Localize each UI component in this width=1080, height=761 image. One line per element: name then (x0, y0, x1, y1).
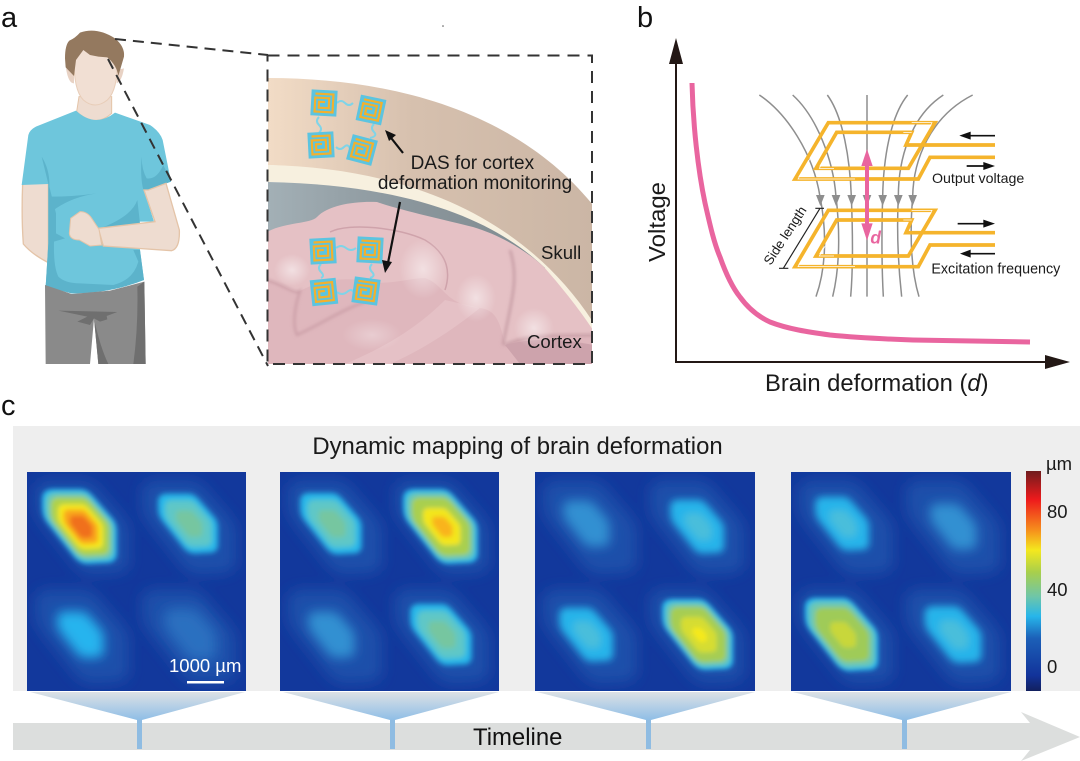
panel label a: a (1, 2, 18, 34)
bottom coil (795, 210, 995, 267)
arrowheads (669, 38, 1070, 369)
colour bar tick labels: µm (1046, 453, 1072, 474)
neck (77, 97, 112, 120)
panel label b: b (637, 2, 653, 34)
field lines (759, 95, 973, 297)
panel: skull and cortex inset (267, 78, 593, 364)
colour bar tick labels: 40 (1047, 579, 1068, 600)
distance arrow (861, 149, 873, 241)
DAS sensor array on cortex (309, 236, 384, 306)
inner cream layer (267, 165, 593, 340)
arrows: DAS pointers (382, 130, 403, 273)
hair (65, 31, 124, 76)
panel label c: c (1, 390, 16, 422)
label: excitation frequency: Excitation frequency (931, 261, 1061, 277)
skull (267, 78, 593, 335)
left arm (22, 183, 48, 263)
label: output voltage: Output voltage (932, 171, 1024, 187)
cortex (267, 202, 593, 364)
callout: DAS: DAS for cortex (411, 153, 535, 174)
icon: person (22, 31, 179, 364)
right arm (98, 183, 179, 251)
heatmap 2 (280, 472, 499, 691)
fist (69, 212, 102, 246)
scale bar label: 1000 µm (169, 655, 241, 676)
side length label: Side length (761, 204, 810, 268)
panel: dynamic mapping background (13, 426, 1080, 691)
diagram: coupled coils with field lines (759, 95, 1061, 297)
small arrows (958, 132, 995, 258)
field arrowheads (816, 195, 917, 206)
timeline arrow (13, 712, 1080, 761)
shirt shading (42, 157, 171, 293)
label: Skull: Skull (541, 242, 581, 263)
scale bar (187, 681, 224, 684)
timeline markers (30, 692, 1011, 749)
heatmap 3 (535, 472, 755, 691)
face (74, 47, 117, 105)
heatmap 4 (791, 472, 1011, 691)
heatmap 1 (27, 472, 246, 691)
dura layer (268, 182, 545, 268)
label: Cortex: Cortex (527, 331, 582, 352)
timeline label: Timeline (473, 724, 562, 751)
x axis label: Brain deformation (d) (765, 370, 989, 397)
axes (676, 60, 1048, 362)
side length bracket (779, 208, 824, 268)
callout: DAS: deformation monitoring (378, 173, 572, 194)
y axis label: Voltage (644, 182, 670, 262)
colour bar (1026, 471, 1041, 691)
distance label: d (870, 227, 881, 247)
trouser shading (58, 282, 146, 364)
colour bar tick labels: 0 (1047, 656, 1057, 677)
chart: voltage vs brain deformation (644, 38, 1070, 397)
colour bar tick labels (1046, 453, 1072, 677)
heading: dynamic mapping: Dynamic mapping of brain deformation (312, 433, 723, 460)
dashed inset frame (268, 56, 592, 364)
top coil (795, 123, 995, 179)
speck (442, 25, 444, 27)
colour bar tick labels: 80 (1047, 501, 1068, 522)
ears (66, 68, 124, 83)
shirt (22, 111, 171, 293)
dashed zoom lines (108, 39, 268, 366)
curve (692, 83, 1030, 342)
trousers (45, 282, 146, 364)
DAS sensor array on skull (307, 89, 386, 166)
